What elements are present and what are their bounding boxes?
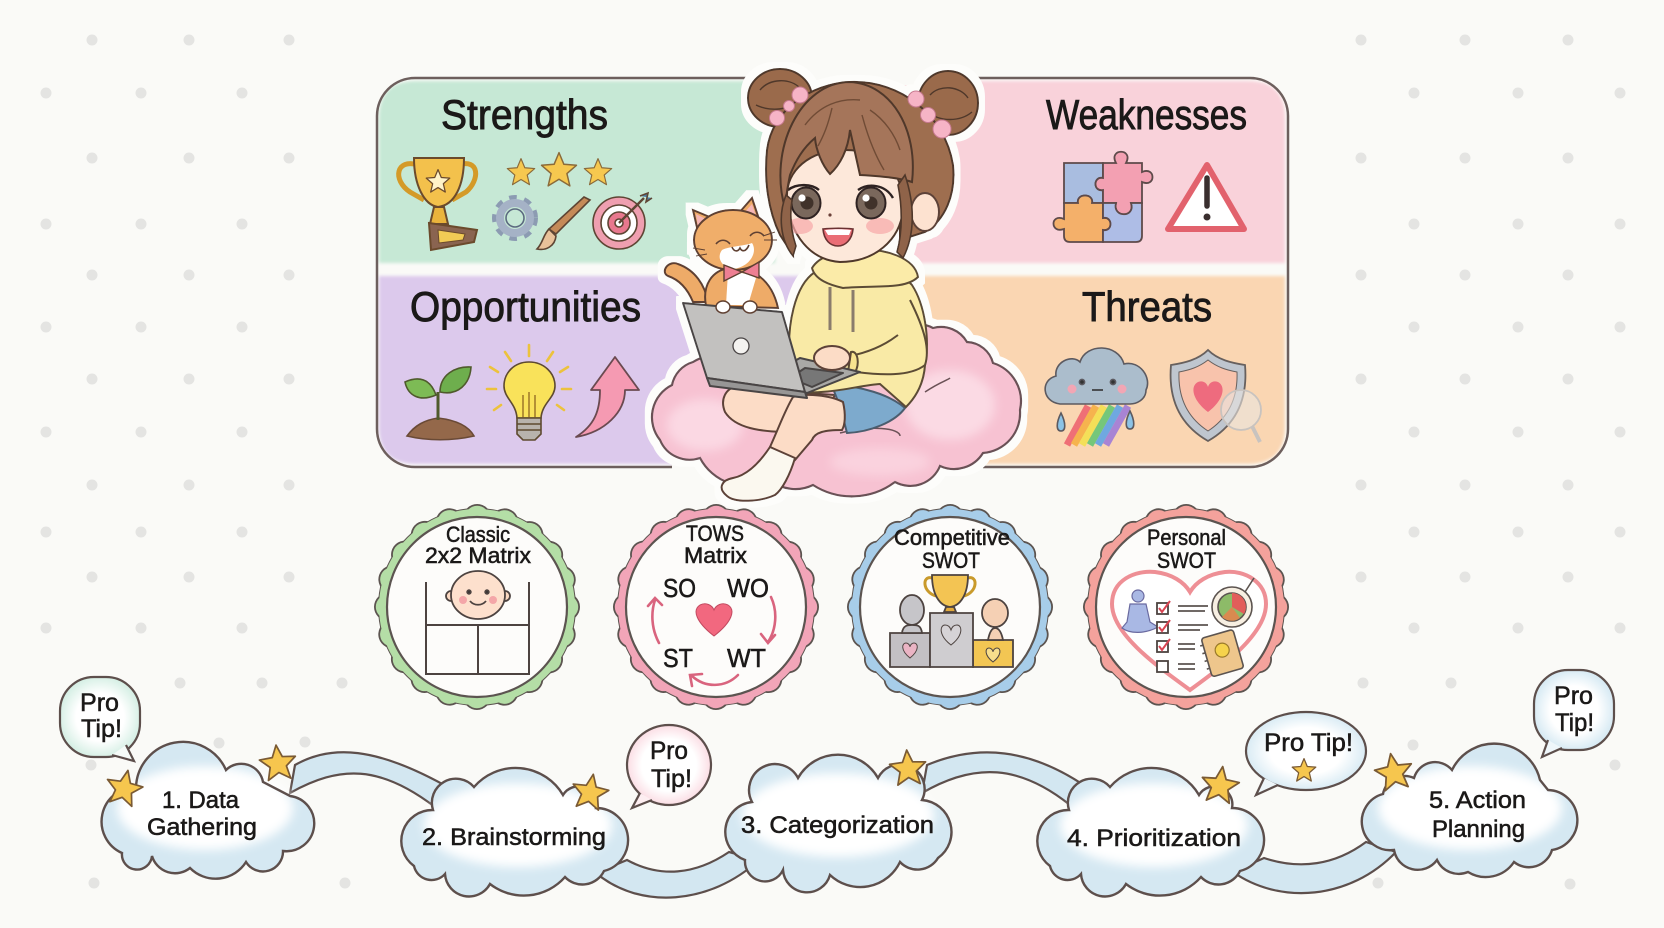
badge: Classic 2x2 Matrix: 2x2 Matrix	[425, 543, 531, 568]
callout: pro tip 1	[60, 677, 140, 761]
icon: paintbrush	[537, 197, 590, 249]
badge: TOWS Matrix: WT	[727, 643, 766, 673]
callout: pro tip 3: Pro Tip!	[1264, 729, 1353, 757]
cat	[665, 198, 778, 308]
badge: Competitive SWOT	[853, 510, 1047, 704]
cloud: step 4	[1037, 768, 1264, 896]
icon: three stars	[507, 153, 612, 186]
badge: TOWS Matrix	[619, 510, 813, 704]
cat paws	[716, 301, 757, 313]
callout: pro tip 2: Tip!	[651, 765, 692, 793]
cloud: step 5: Planning	[1432, 816, 1525, 843]
icon: target with dart	[593, 193, 652, 249]
panel: opportunities quadrant	[379, 276, 800, 464]
cloud: step 4: 4. Prioritization	[1067, 825, 1241, 852]
cloud: step 5	[1362, 744, 1577, 877]
podium and trophy	[890, 575, 1013, 667]
panel: threats quadrant	[900, 276, 1285, 464]
badge: TOWS Matrix: Matrix	[684, 543, 747, 568]
panel: strengths quadrant	[379, 81, 775, 263]
side locks	[781, 175, 912, 258]
icon: warning triangle	[1168, 165, 1244, 229]
badge: Competitive SWOT: Competitive	[894, 525, 1010, 550]
callout: pro tip 4: Tip!	[1555, 709, 1594, 737]
hand	[814, 346, 850, 370]
cloud: step 3: 3. Categorization	[741, 812, 934, 839]
outline gap at top	[753, 70, 977, 85]
sock	[722, 447, 795, 501]
bangs	[780, 82, 913, 208]
scalloped ring	[380, 510, 574, 704]
icon: puzzle	[1054, 152, 1152, 242]
icon: growth arrow	[576, 357, 639, 437]
heading: Threats: Threats	[1082, 283, 1212, 330]
face	[787, 150, 903, 262]
ear	[911, 193, 939, 231]
ribbon 1 to 2	[290, 752, 453, 807]
salad plate	[1212, 578, 1254, 627]
callout: pro tip 2: Pro	[650, 737, 688, 765]
heading: Opportunities: Opportunities	[410, 283, 641, 330]
front leg	[770, 395, 845, 460]
right eye	[856, 188, 886, 218]
heart	[696, 604, 732, 636]
icon: rain cloud with rainbow	[1045, 348, 1148, 445]
cloud: step 3	[725, 755, 951, 892]
hair highlights	[805, 100, 900, 170]
matrix grid	[426, 582, 529, 674]
shorts	[832, 386, 905, 433]
bows right	[908, 91, 951, 138]
notebook	[1198, 629, 1244, 678]
laptop	[683, 303, 860, 398]
cloud: step 2: 2. Brainstorming	[422, 824, 606, 851]
cloud: step 5: 5. Action	[1429, 787, 1526, 814]
callout: pro tip 1: Pro	[80, 689, 119, 717]
icon: sprout	[405, 367, 474, 440]
badge: Classic 2x2 Matrix: Classic	[446, 522, 510, 547]
ribbon 4 to 5	[1233, 842, 1396, 893]
icon: shield with heart and magnifier	[1171, 350, 1261, 442]
callout: pro tip 3	[1246, 712, 1366, 795]
badge: TOWS Matrix: WO	[727, 573, 769, 603]
bows left	[770, 87, 808, 126]
heading: Weaknesses: Weaknesses	[1046, 91, 1247, 138]
outline gap at bottom	[672, 460, 983, 472]
scalloped ring	[619, 510, 813, 704]
rear leg	[723, 386, 835, 432]
badge: TOWS Matrix: SO	[663, 573, 696, 603]
badge: TOWS Matrix: TOWS	[686, 521, 744, 546]
badge: Classic 2x2 Matrix	[380, 510, 574, 704]
callout: pro tip 4	[1534, 670, 1614, 757]
meditation figure	[1122, 590, 1158, 632]
cloud: step 1	[102, 742, 314, 879]
bun left	[748, 69, 812, 127]
badge: Competitive SWOT: SWOT	[922, 548, 980, 573]
back hair	[766, 82, 953, 255]
scalloped ring	[1089, 510, 1283, 704]
illustration: girl with cat on cushion	[652, 69, 1021, 501]
scalloped ring	[853, 510, 1047, 704]
face	[446, 571, 510, 619]
ribbon 2 to 3	[596, 852, 759, 898]
badge: TOWS Matrix: ST	[663, 643, 693, 673]
cushion	[652, 323, 1021, 496]
ribbon 3 to 4	[922, 752, 1095, 805]
callout: pro tip 2	[627, 725, 711, 808]
icon: gear	[496, 199, 534, 237]
heading: Strengths: Strengths	[441, 91, 608, 138]
bun right	[918, 71, 978, 135]
callout: pro tip 1: Tip!	[81, 715, 122, 743]
panel outline	[377, 78, 1288, 467]
cloud: step 1: Gathering	[147, 814, 257, 841]
icon: light bulb	[487, 345, 571, 440]
checklist	[1157, 601, 1208, 672]
panel: weaknesses quadrant	[900, 81, 1285, 263]
cloud: step 1: 1. Data	[162, 787, 240, 814]
panel: SWOT matrix	[377, 70, 1288, 472]
left eye	[792, 188, 820, 218]
process path ribbons	[290, 752, 1396, 898]
hoodie	[789, 250, 927, 407]
cycle arrows	[648, 597, 775, 686]
badge: Personal SWOT	[1089, 510, 1283, 704]
heart frame	[1112, 572, 1266, 690]
callout: pro tip 4: Pro	[1554, 682, 1593, 710]
icon: trophy	[399, 158, 477, 250]
stars on path	[103, 743, 1415, 811]
badge: Personal SWOT: SWOT	[1157, 548, 1216, 573]
cloud: step 2	[401, 768, 628, 896]
badge: Personal SWOT: Personal	[1147, 525, 1226, 550]
